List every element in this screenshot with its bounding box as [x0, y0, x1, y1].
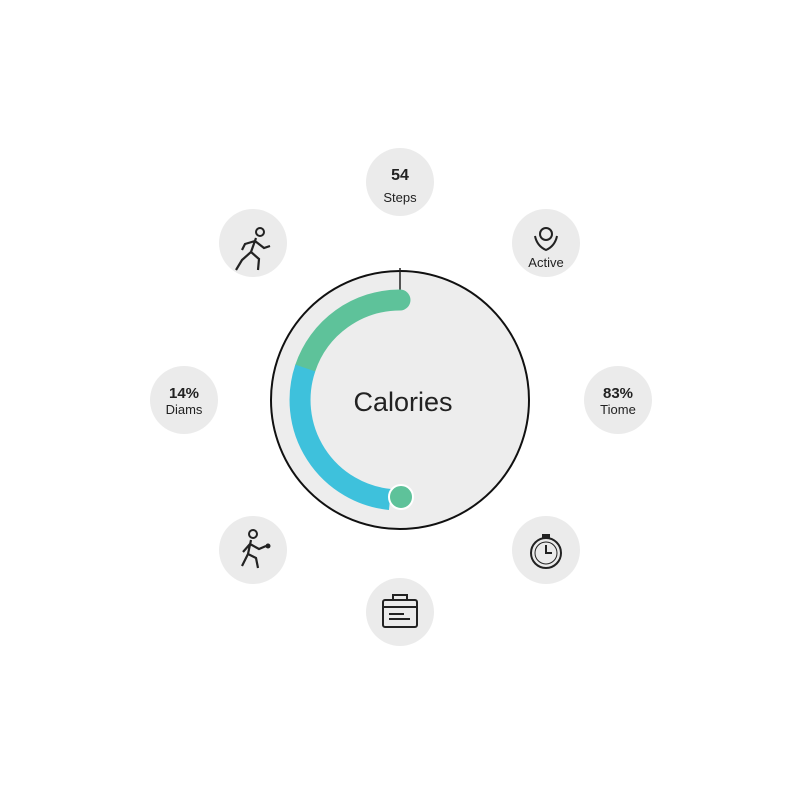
- badge: briefcase: [366, 578, 434, 646]
- arc: green segment: [305, 300, 400, 368]
- badge: active: [512, 209, 580, 277]
- center label: Calories: [353, 387, 453, 417]
- badge: steps: Steps: [383, 190, 417, 205]
- badge: 83%: Tiome: [600, 402, 636, 417]
- badge: walker: [219, 516, 287, 584]
- badge: 83%: [584, 366, 652, 434]
- badge: 14%: Diams: [166, 402, 203, 417]
- badge: steps: 54: [391, 167, 409, 184]
- badge: 14%: 14%: [169, 385, 199, 402]
- arc end dot: [389, 485, 413, 509]
- arc: blue segment: [300, 368, 390, 500]
- badge: stopwatch: [512, 516, 580, 584]
- badge: 14%: [150, 366, 218, 434]
- badge: 83%: 83%: [603, 385, 633, 402]
- main dial: [271, 268, 529, 529]
- badge: steps: [366, 148, 434, 216]
- badge: runner: [219, 209, 287, 277]
- badge: active: Active: [528, 255, 564, 270]
